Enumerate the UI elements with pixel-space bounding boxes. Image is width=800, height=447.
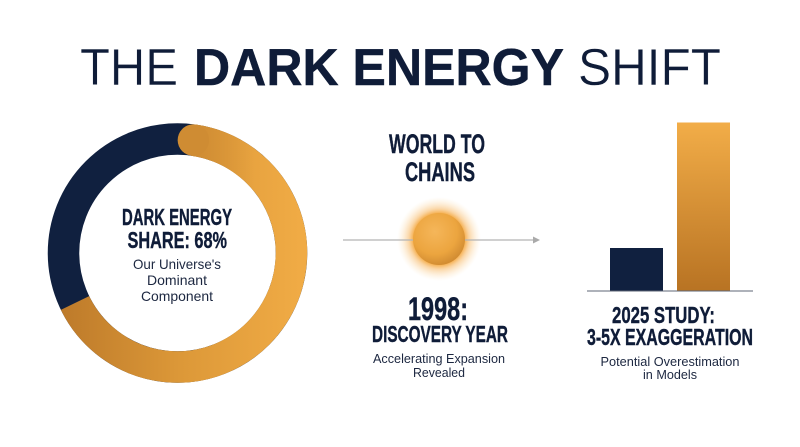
panel: dark energy share donut bbox=[64, 124, 292, 367]
bar chart bbox=[587, 122, 753, 291]
study heading bbox=[587, 302, 753, 350]
donut description: Our Universe's bbox=[133, 256, 221, 272]
icon: glowing orb bbox=[413, 213, 465, 265]
donut heading: SHARE: 68% bbox=[128, 227, 227, 253]
discovery description bbox=[373, 351, 505, 380]
title: SHIFT bbox=[578, 39, 721, 97]
year heading: 1998: bbox=[408, 291, 468, 327]
title bbox=[80, 39, 721, 97]
study description: in Models bbox=[643, 367, 697, 382]
title: DARK ENERGY bbox=[194, 39, 564, 97]
donut heading bbox=[122, 204, 232, 253]
donut chart bbox=[64, 124, 292, 367]
heading: world to chains: WORLD TO bbox=[389, 129, 485, 159]
heading: world to chains: CHAINS bbox=[405, 157, 475, 187]
year heading bbox=[372, 291, 508, 347]
discovery description: Revealed bbox=[413, 365, 465, 380]
arrow: timeline bbox=[343, 236, 540, 244]
panel: 1998 discovery bbox=[343, 129, 540, 380]
discovery description: Accelerating Expansion bbox=[373, 351, 505, 366]
study heading: 2025 STUDY: bbox=[612, 302, 715, 328]
icon: orb glow bbox=[397, 197, 481, 281]
year heading: DISCOVERY YEAR bbox=[372, 321, 508, 347]
donut description: Dominant bbox=[147, 272, 207, 288]
panel: 2025 study bbox=[587, 122, 753, 382]
title: THE bbox=[80, 39, 178, 97]
donut description bbox=[133, 256, 221, 304]
study description bbox=[600, 354, 740, 382]
donut heading: DARK ENERGY bbox=[122, 204, 232, 230]
heading: world to chains bbox=[389, 129, 485, 187]
donut description: Component bbox=[141, 288, 213, 304]
study description: Potential Overestimation bbox=[600, 354, 740, 369]
